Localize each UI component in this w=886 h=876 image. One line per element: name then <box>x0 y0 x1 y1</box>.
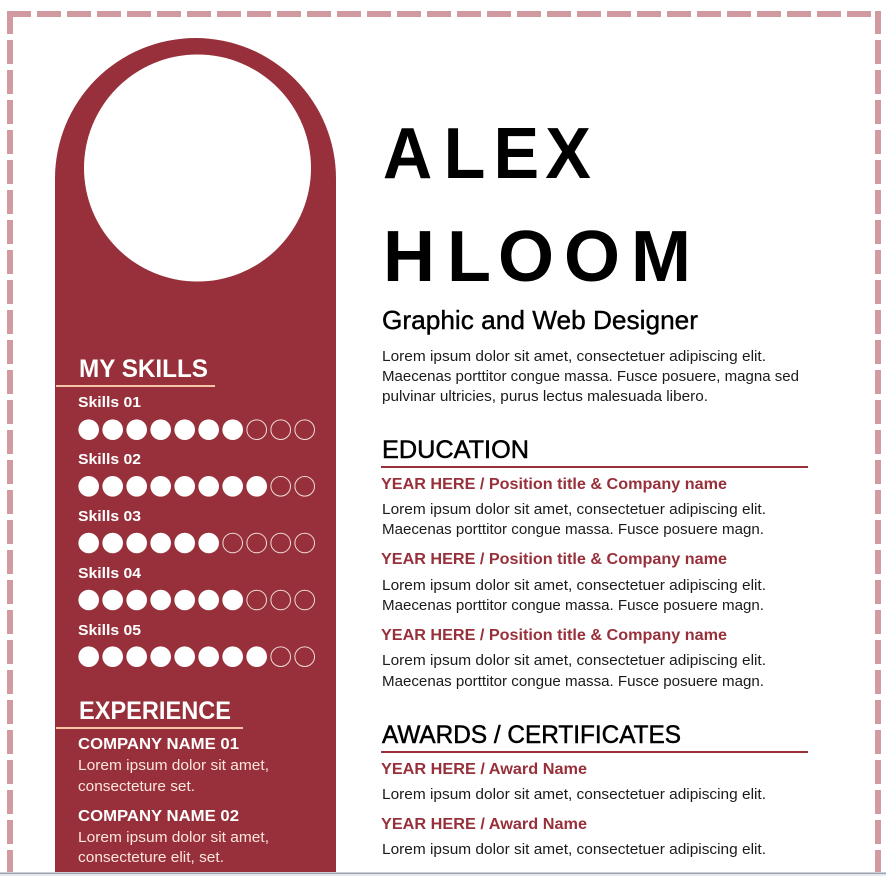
company 02 <box>78 808 269 866</box>
education entry 2: Maecenas porttitor congue massa. Fusce posuere magn. <box>382 597 764 614</box>
heading: experience: EXPERIENCE <box>79 697 231 725</box>
education entry 3: Maecenas porttitor congue massa. Fusce posuere magn. <box>382 673 764 690</box>
intro text: Maecenas porttitor congue massa. Fusce posuere, magna sed <box>382 368 799 385</box>
company 02: Lorem ipsum dolor sit amet, <box>78 829 269 846</box>
experience list <box>78 736 269 866</box>
intro text <box>382 348 799 405</box>
skill 01: Skills 01 <box>78 394 141 411</box>
heading: education: EDUCATION <box>382 436 529 464</box>
company 01 <box>78 736 269 795</box>
award entry 2: YEAR HERE / Award Name <box>381 816 587 833</box>
education entry 3 <box>381 627 766 690</box>
intro text: pulvinar ultricies, purus lectus malesuada libero. <box>382 388 708 405</box>
company 01: COMPANY NAME 01 <box>78 736 239 753</box>
heading: my skills: MY SKILLS <box>79 355 208 383</box>
title: name: ALEX <box>383 112 591 193</box>
education entry 1: Maecenas porttitor congue massa. Fusce posuere magn. <box>382 521 764 538</box>
education entry 1: Lorem ipsum dolor sit amet, consectetuer adipiscing elit. <box>382 501 766 518</box>
education entry 3: Lorem ipsum dolor sit amet, consectetuer adipiscing elit. <box>382 652 766 669</box>
intro text: Lorem ipsum dolor sit amet, consectetuer adipiscing elit. <box>382 348 766 365</box>
skill 04 <box>78 565 315 610</box>
education entry 2: YEAR HERE / Position title & Company name <box>381 551 727 568</box>
education entry 3: YEAR HERE / Position title & Company name <box>381 627 727 644</box>
skill 04: Skills 04 <box>78 565 142 582</box>
award entry 1: Lorem ipsum dolor sit amet, consectetuer adipiscing elit. <box>382 786 766 803</box>
skill 02 <box>78 451 315 497</box>
award entry 2: Lorem ipsum dolor sit amet, consectetuer adipiscing elit. <box>382 841 766 858</box>
panel: left sidebar <box>55 38 336 872</box>
skill 02: Skills 02 <box>78 451 141 468</box>
title: name <box>383 112 691 297</box>
skills list <box>78 394 315 667</box>
heading: awards: AWARDS / CERTIFICATES <box>382 721 681 749</box>
company 01: consecteture set. <box>78 778 195 795</box>
section: education <box>381 436 808 690</box>
award entry 2 <box>381 816 766 858</box>
company 02: COMPANY NAME 02 <box>78 808 239 825</box>
skill 05 <box>78 622 315 667</box>
education entry 2 <box>381 551 766 614</box>
title: name: HLOOM <box>383 217 691 297</box>
photo placeholder circle <box>84 54 311 282</box>
skill 03: Skills 03 <box>78 508 141 525</box>
award entry 1 <box>381 761 766 803</box>
section: awards <box>381 721 808 858</box>
skill 01 <box>78 394 315 440</box>
skill 03 <box>78 508 315 553</box>
company 01: Lorem ipsum dolor sit amet, <box>78 757 269 774</box>
award entry 1: YEAR HERE / Award Name <box>381 761 587 778</box>
education entry 1 <box>381 476 766 538</box>
skill 05: Skills 05 <box>78 622 141 639</box>
company 02: consecteture elit, set. <box>78 849 224 866</box>
subtitle: Graphic and Web Designer <box>382 305 698 335</box>
education entry 1: YEAR HERE / Position title & Company name <box>381 476 727 493</box>
education entry 2: Lorem ipsum dolor sit amet, consectetuer adipiscing elit. <box>382 577 766 594</box>
